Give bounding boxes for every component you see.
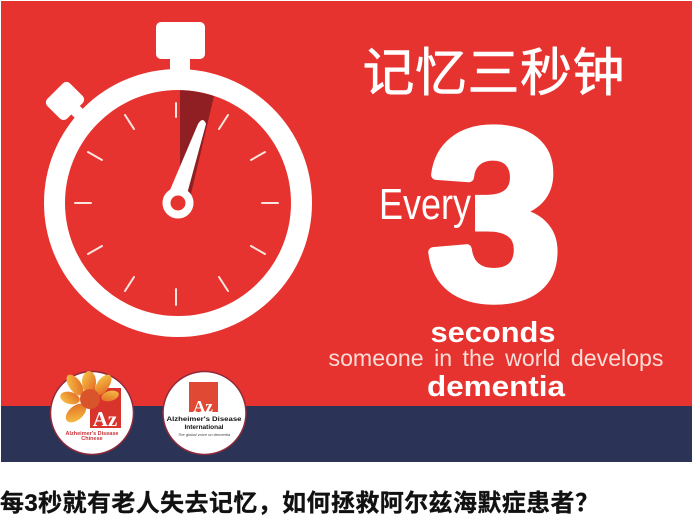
headline caption: 每3秒就有老人失去记忆，如何拯救阿尔兹海默症患者？ [0,490,599,517]
logo tagline: The global voice on dementia [178,432,231,437]
text: dementia: dementia [427,371,566,403]
minute tick marks [75,103,278,305]
text: Every: Every [379,180,471,229]
icon: stopwatch [44,22,301,326]
title: 记忆三秒钟: 记忆三秒钟 [362,45,624,103]
stopwatch ring [54,80,302,326]
logo letters Az: Az [193,397,213,416]
red background panel [1,1,692,406]
logo sunflower [59,371,120,426]
logo badge circle [50,372,134,454]
big numeral 3: 3 [428,80,561,348]
navy footer band [1,406,692,462]
logo red square [189,382,218,412]
logo name: Alzheimer's Disease [166,416,242,423]
stopwatch crown button [156,22,205,73]
logo letters Az: Az [93,407,117,431]
stopwatch hand [170,120,206,194]
three-second elapsed wedge [180,90,214,194]
cover behind Every [376,184,475,236]
logo name second line: International [184,424,224,431]
logo caption second line: Chinese [81,436,103,442]
logo caption: Alzheimer's Disease [66,431,118,437]
stopwatch side button [44,80,95,131]
logo badge circle [163,372,246,454]
text: someone in the world develops: someone in the world develops [328,345,664,371]
logo: Alzheimer's Disease Chinese [50,371,134,454]
logo red square [90,388,121,428]
stopwatch hub [166,192,190,214]
text: seconds: seconds [430,317,556,349]
logo: Alzheimer's Disease International [163,372,246,454]
